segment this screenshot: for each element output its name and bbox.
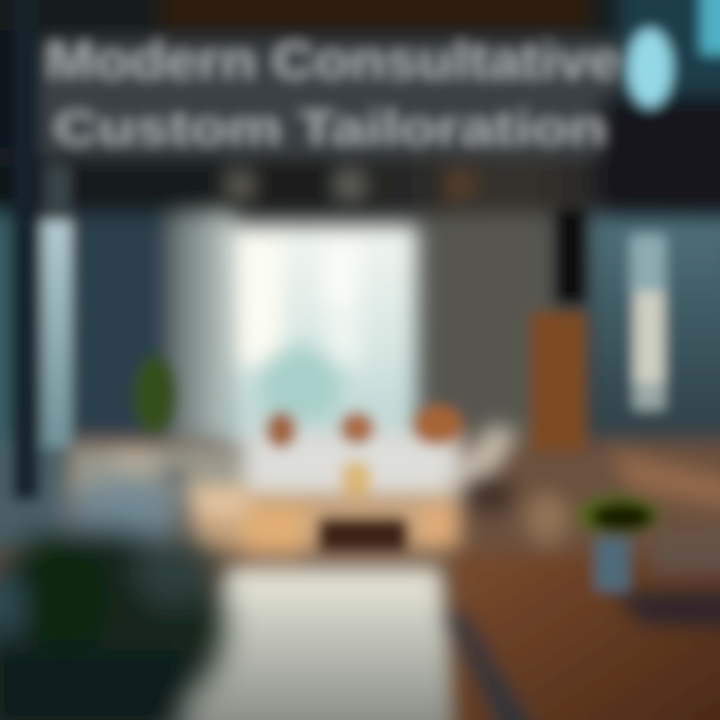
title (46, 32, 621, 154)
potted plant left (133, 355, 177, 435)
columns (13, 0, 586, 500)
right window glow (630, 234, 666, 410)
potted plant on table (576, 495, 660, 592)
blue light glow (627, 0, 720, 108)
coffee table (318, 518, 408, 552)
cushions (266, 405, 462, 448)
title line 2: Custom Tailoration (54, 101, 606, 154)
sofa and chairs (70, 405, 518, 505)
foreground plant (0, 480, 225, 720)
floor rug area (150, 485, 465, 720)
wooden table right (445, 450, 720, 720)
ceiling and title band (0, 0, 720, 210)
white sofa seating (70, 425, 518, 505)
table lamp (342, 462, 370, 500)
title line 1: Modern Consultative (46, 32, 621, 89)
wooden door panel (530, 312, 586, 452)
window (228, 225, 418, 450)
